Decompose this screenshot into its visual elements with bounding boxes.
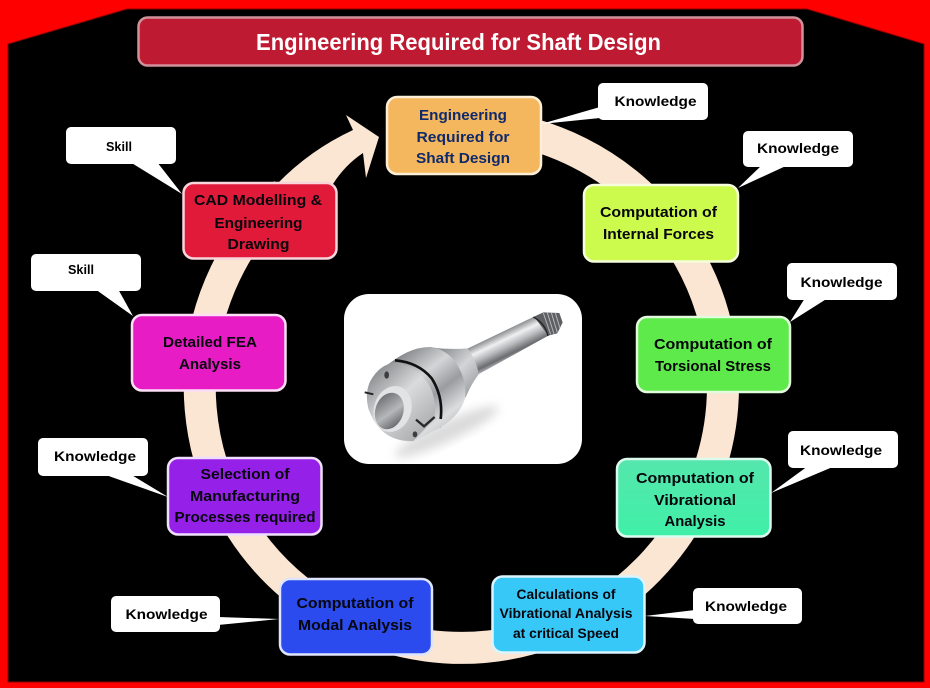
step: Calculations of Vibrational Analysis at critical Speed [492, 576, 644, 652]
central shaft image panel [344, 294, 582, 465]
step: Computation of Vibrational Analysis: Analysis [664, 513, 726, 530]
callout: Knowledge for internal forces [738, 131, 853, 188]
callout: Knowledge for torsional stress: Knowledge [800, 274, 883, 290]
title banner: Engineering Required for Shaft Design [256, 29, 661, 55]
step: Computation of Internal Forces: Computation of [600, 204, 718, 221]
callout: Skill for FEA: Skill [68, 263, 94, 277]
step: Selection of Manufacturing Processes required: Manufacturing [190, 488, 300, 505]
step: Selection of Manufacturing Processes required: Processes required [174, 509, 316, 526]
step: Engineering Required for Shaft Design: Shaft Design [416, 150, 510, 167]
circular process arrow [200, 115, 723, 648]
callout: Skill for CAD [66, 127, 182, 194]
step: Calculations of Vibrational Analysis at critical Speed: Vibrational Analysis [500, 606, 632, 621]
step: Computation of Internal Forces: Internal Forces [603, 226, 714, 243]
callout: Knowledge for shaft design: Knowledge [614, 93, 697, 109]
callout: Knowledge for internal forces: Knowledge [757, 140, 839, 156]
callout: Knowledge for critical speed: Knowledge [705, 598, 787, 614]
callout: Knowledge for modal analysis: Knowledge [126, 606, 208, 622]
callout: Knowledge for torsional stress [787, 263, 897, 322]
step: Computation of Vibrational Analysis: Vibrational [654, 492, 736, 509]
callout: Knowledge for critical speed [645, 588, 802, 624]
step: Selection of Manufacturing Processes required [168, 458, 322, 534]
step: Computation of Torsional Stress: Computation of [654, 336, 773, 353]
step: Engineering Required for Shaft Design [387, 97, 541, 174]
icon: machined shaft [365, 312, 563, 465]
step: Calculations of Vibrational Analysis at critical Speed: at critical Speed [513, 626, 619, 641]
step: CAD Modelling and Engineering Drawing: Engineering [214, 215, 302, 232]
title banner [138, 18, 802, 66]
step: Computation of Modal Analysis: Modal Analysis [298, 617, 412, 634]
step: CAD Modelling and Engineering Drawing: CAD Modelling & [194, 192, 322, 209]
step: Computation of Vibrational Analysis [617, 459, 770, 536]
callout: Knowledge for modal analysis [111, 596, 279, 632]
step: Computation of Torsional Stress: Torsional Stress [655, 358, 771, 375]
step: Calculations of Vibrational Analysis at critical Speed: Calculations of [516, 587, 616, 602]
step: CAD Modelling and Engineering Drawing [184, 183, 336, 258]
callout: Knowledge for manufacturing processes: Knowledge [54, 448, 136, 464]
step: CAD Modelling and Engineering Drawing: Drawing [228, 236, 290, 253]
step: Engineering Required for Shaft Design: Engineering [419, 107, 507, 124]
step: Detailed FEA Analysis: Detailed FEA [163, 334, 257, 351]
step: Computation of Modal Analysis [280, 579, 432, 654]
step: Computation of Internal Forces [584, 185, 738, 262]
callout: Knowledge for vibrational analysis [771, 431, 898, 493]
callout: Knowledge for manufacturing processes [38, 438, 168, 497]
step: Detailed FEA Analysis: Analysis [179, 356, 241, 373]
step: Selection of Manufacturing Processes required: Selection of [200, 466, 291, 483]
callout: Skill for FEA [31, 254, 141, 316]
step: Computation of Modal Analysis: Computation of [296, 595, 415, 612]
step: Computation of Vibrational Analysis: Computation of [636, 470, 755, 487]
callout: Knowledge for shaft design [541, 83, 708, 124]
callout: Knowledge for vibrational analysis: Knowledge [800, 442, 882, 458]
callout: Skill for CAD: Skill [106, 140, 132, 154]
step: Computation of Torsional Stress [637, 317, 790, 392]
step: Detailed FEA Analysis [132, 315, 286, 390]
step: Engineering Required for Shaft Design: Required for [416, 129, 510, 146]
